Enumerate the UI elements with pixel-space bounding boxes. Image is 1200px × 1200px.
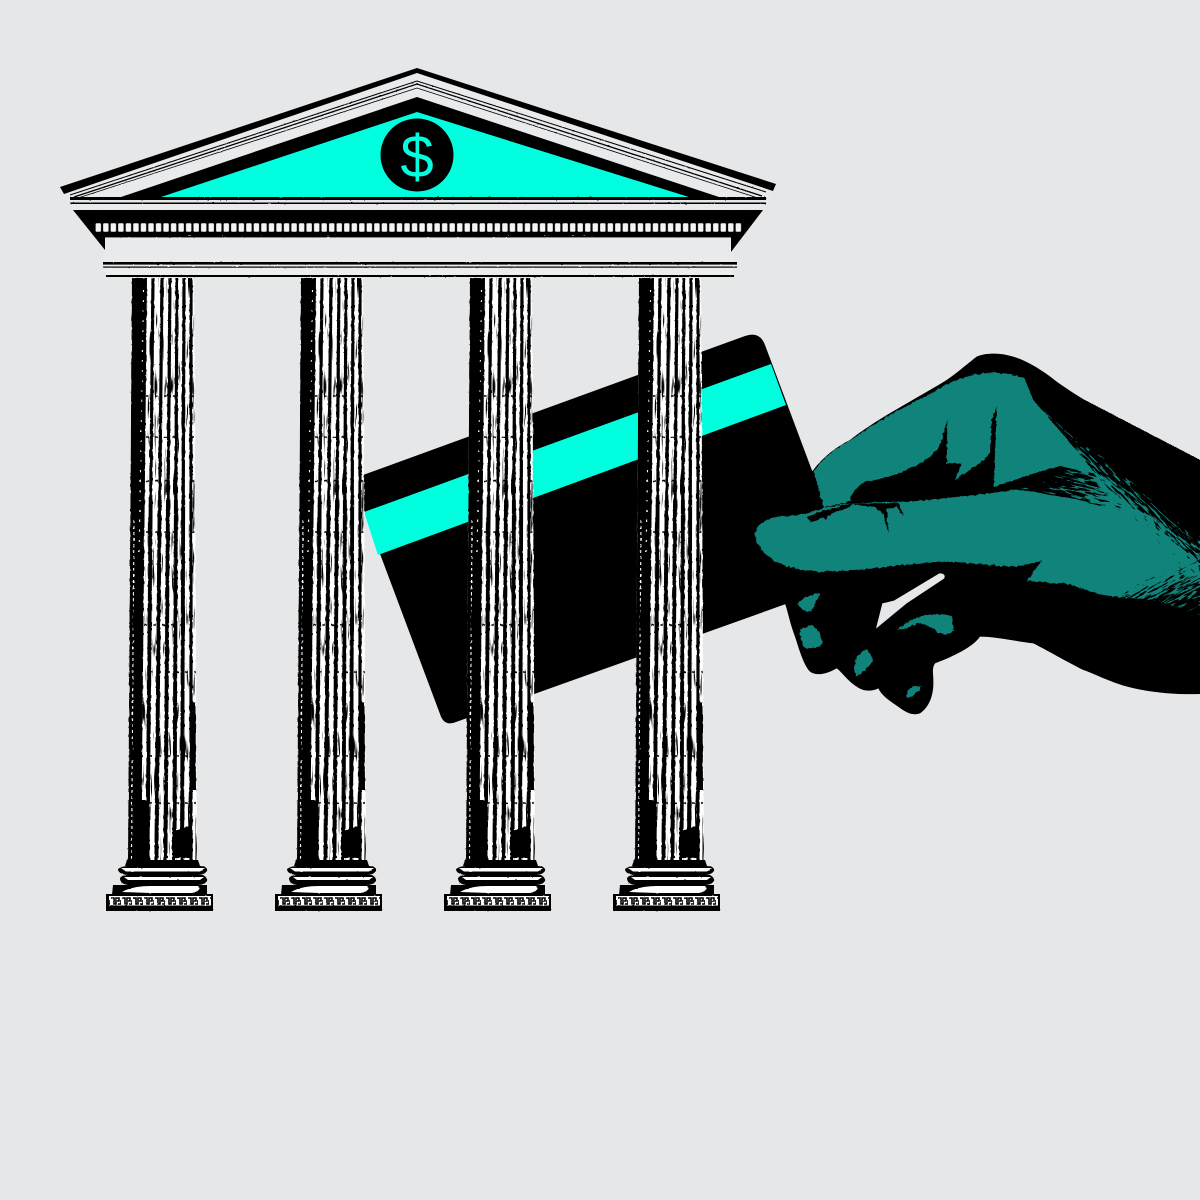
tympanum [158, 112, 692, 198]
card body [352, 335, 853, 723]
entablature [73, 210, 763, 277]
roof edge [60, 68, 776, 194]
pediment roof fill [64, 74, 772, 198]
hatched shading above thumb [997, 441, 1140, 538]
gap between fingers [876, 573, 945, 629]
index finger and back of hand [755, 373, 1200, 617]
icon: dollar coin [380, 118, 454, 192]
column 3 [444, 278, 551, 911]
hatched shading under wrist [1074, 513, 1200, 663]
column 1 [106, 278, 213, 911]
icon: dollar coin: $ [400, 123, 434, 190]
crease between finger and thumb [824, 407, 1068, 507]
cornice [73, 210, 763, 252]
pediment base lines [70, 197, 766, 209]
column 2 [275, 278, 382, 911]
hand silhouette [755, 354, 1200, 714]
thumb knuckle creases [807, 503, 904, 533]
column 4 [613, 278, 720, 911]
pediment [60, 68, 776, 209]
hand [755, 277, 1200, 714]
credit card [352, 335, 853, 723]
roof moulding lines [70, 81, 766, 198]
finger highlights [797, 593, 953, 698]
card magnetic stripe [364, 364, 786, 555]
dentils [95, 223, 743, 232]
hatched shading on back of hand [907, 277, 1200, 683]
inner black triangle [118, 97, 722, 198]
